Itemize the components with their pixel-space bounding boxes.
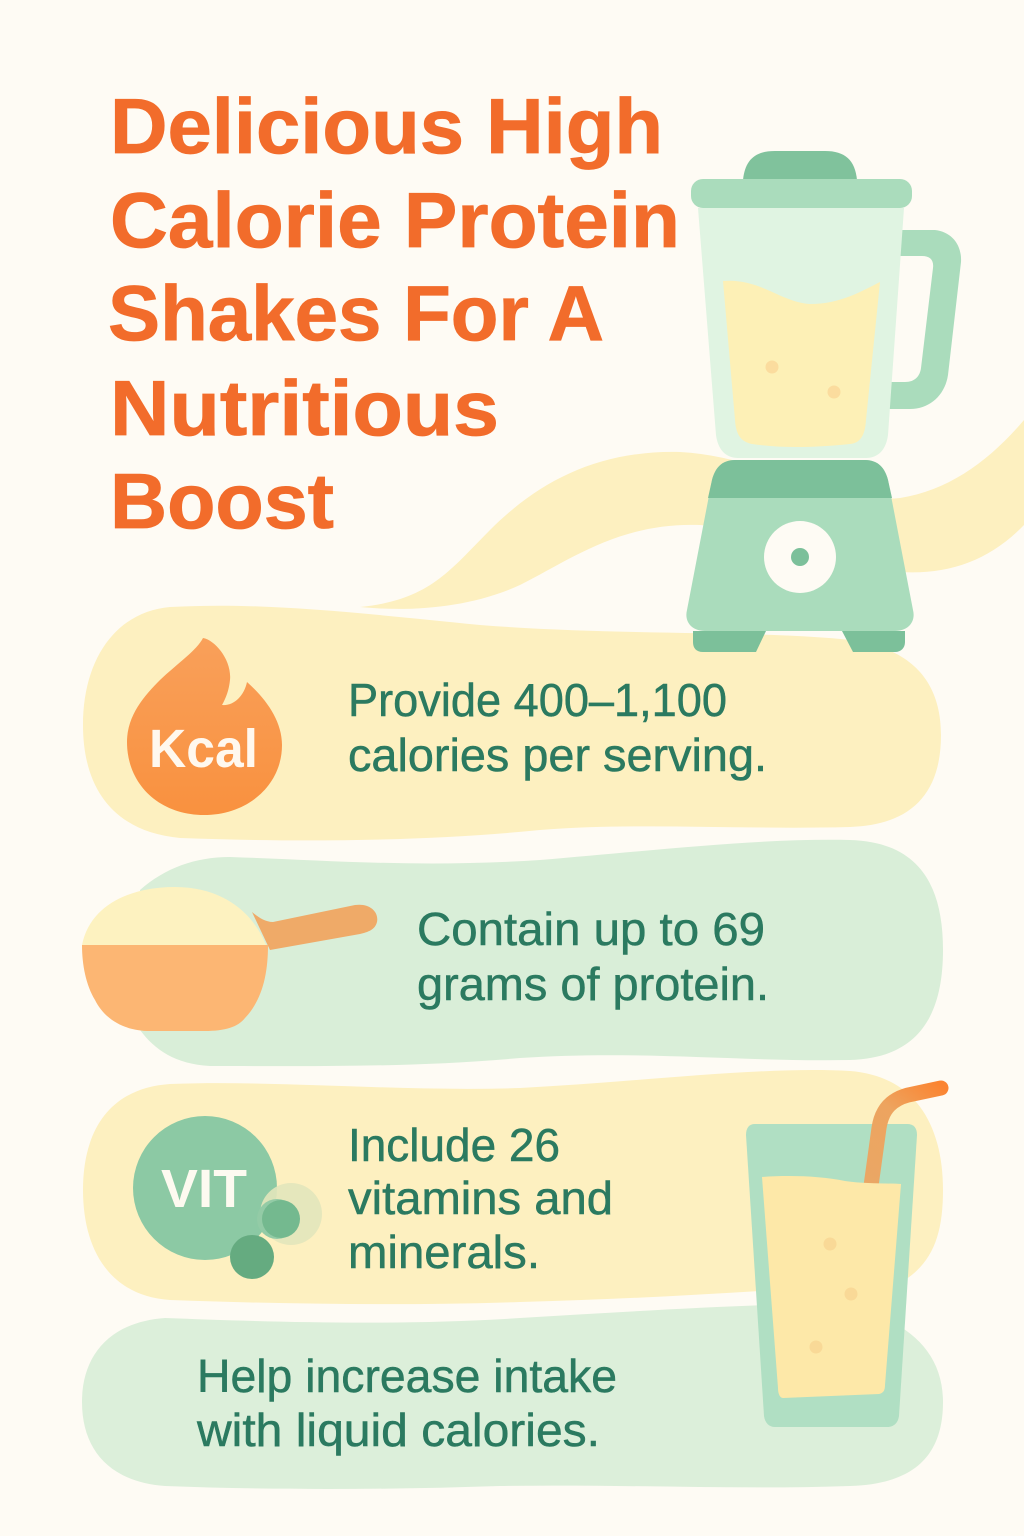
blender base [686, 460, 914, 631]
title: Delicious High [110, 82, 663, 170]
icon: Kcal flame [127, 638, 282, 815]
blender handle [885, 230, 961, 409]
text: liquid calories: Help increase intake [197, 1350, 617, 1402]
icon: Kcal flame: Kcal [149, 719, 258, 779]
title: Shakes For A [108, 269, 604, 357]
icon: vitamins [133, 1116, 322, 1279]
text: protein [417, 903, 769, 1010]
text: vitamins [348, 1119, 613, 1278]
straw [871, 1088, 941, 1186]
text: vitamins: minerals. [348, 1226, 540, 1278]
icon: blender [686, 151, 961, 652]
shake [762, 1176, 901, 1398]
title [108, 82, 680, 545]
shake in jar [723, 281, 880, 447]
panel: liquid calories [82, 1304, 943, 1489]
icon: vitamins: VIT [161, 1159, 247, 1219]
decorative ribbon [360, 420, 1024, 609]
text: calories: calories per serving. [348, 729, 767, 781]
title: Boost [110, 457, 334, 545]
blender lid [743, 151, 857, 180]
text: vitamins: vitamins and [348, 1172, 613, 1224]
icon: protein scoop [82, 887, 377, 1031]
blender jar [698, 208, 904, 458]
icon: shake glass [746, 1088, 941, 1427]
text: vitamins: Include 26 [348, 1119, 560, 1171]
panel: vitamins [83, 1070, 943, 1304]
panel: protein [140, 840, 943, 1066]
text: calories [348, 674, 767, 781]
text: protein: Contain up to 69 [417, 903, 765, 955]
text: liquid calories: with liquid calories. [196, 1404, 600, 1456]
text: calories: Provide 400–1,100 [348, 674, 727, 726]
title: Nutritious [110, 364, 499, 452]
text: liquid calories [196, 1350, 617, 1456]
title: Calorie Protein [110, 176, 680, 264]
text: protein: grams of protein. [417, 958, 769, 1010]
panel: calories [83, 606, 941, 840]
